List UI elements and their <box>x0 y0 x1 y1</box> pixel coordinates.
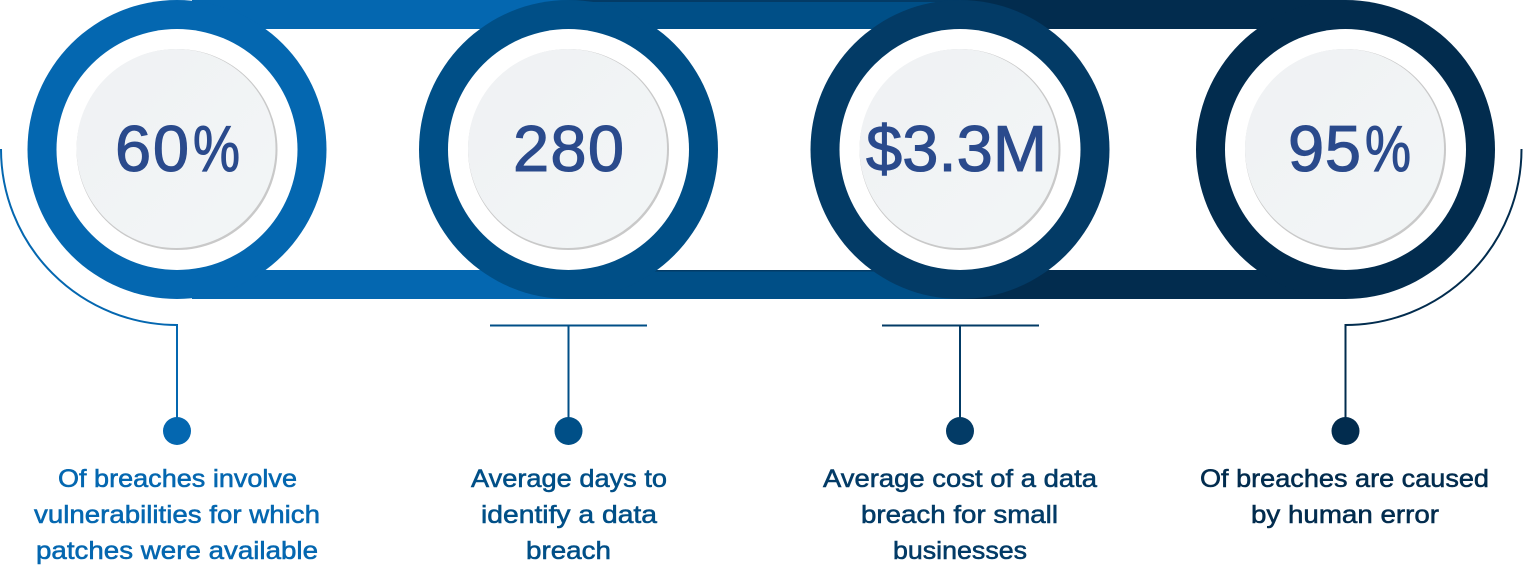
connector band: segment 2 <box>568 0 968 299</box>
stat 2: 280 circle <box>419 0 718 299</box>
caption 4: Of breaches are caused <box>1200 465 1489 493</box>
value: 95%: % <box>1365 112 1411 185</box>
leader 2: bar, stem and dot <box>490 326 647 445</box>
value: 280: 280 <box>513 112 624 185</box>
caption 3: Average cost of a data <box>823 465 1097 493</box>
leader 3: bar, stem and dot <box>882 326 1039 445</box>
caption 3 <box>823 465 1097 565</box>
stat 4: 95% circle <box>1196 0 1495 299</box>
value: 95%: 95 <box>1288 112 1361 185</box>
value: 60% <box>115 112 240 185</box>
stat 1: 60% circle <box>28 0 326 299</box>
caption 2: breach <box>526 537 611 565</box>
leader 4: arc, stem and dot <box>1332 149 1522 445</box>
caption 1: vulnerabilities for which <box>34 501 320 529</box>
caption 3: breach for small <box>861 501 1058 529</box>
caption 1: patches were available <box>36 537 318 565</box>
caption 1: Of breaches involve <box>58 465 297 493</box>
connector band: segment 3 <box>960 0 1346 299</box>
caption 2 <box>471 465 667 565</box>
connector band: segment 1 <box>192 0 577 299</box>
value: 60%: 60 <box>115 112 189 185</box>
caption 2: Average days to <box>471 465 667 493</box>
leader 1: arc, stem and dot <box>1 149 191 445</box>
caption 2: identify a data <box>481 501 657 529</box>
value: 60%: % <box>193 112 240 185</box>
caption 1 <box>34 465 320 565</box>
caption 4: by human error <box>1251 501 1439 529</box>
value: 95% <box>1288 112 1411 185</box>
caption 4 <box>1200 465 1489 529</box>
value: $3.3M: $3.3M <box>866 112 1047 185</box>
stat 3: $3.3M circle <box>810 0 1110 299</box>
caption 3: businesses <box>893 537 1027 565</box>
